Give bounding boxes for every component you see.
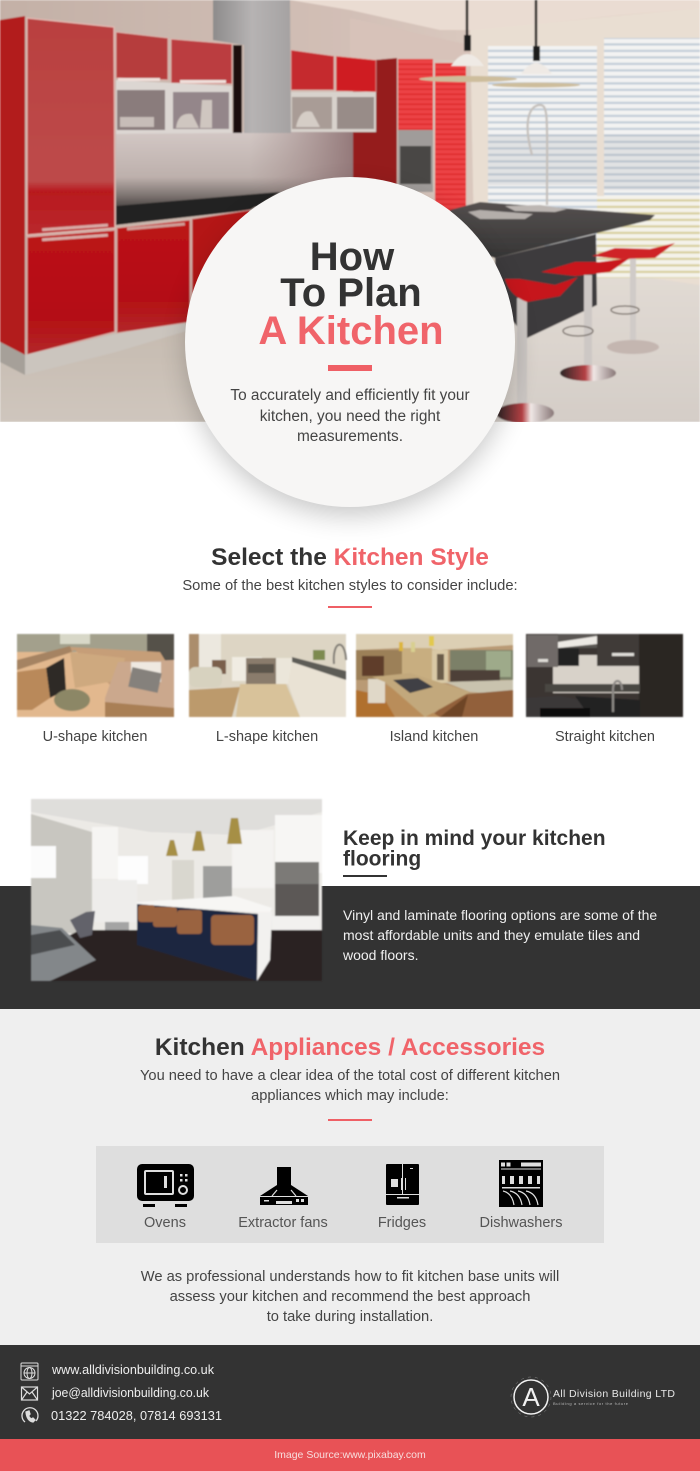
logo: All Division Building: All Division Building LTD xyxy=(553,1388,675,1400)
heading: flooring: Keep in mind your kitchen xyxy=(343,827,606,850)
title xyxy=(258,235,444,353)
style rule xyxy=(328,606,372,608)
closing text: to take during installation. xyxy=(267,1309,433,1325)
label: U-shape kitchen: U-shape kitchen xyxy=(43,729,147,745)
flooring rule xyxy=(343,875,387,877)
email: joe@alldivisionbuilding.co.uk xyxy=(51,1385,209,1400)
closing text: We as professional understands how to fit kitchen base units will xyxy=(141,1269,559,1285)
flooring text: Vinyl and laminate flooring options are some of the xyxy=(343,907,657,923)
title: How xyxy=(310,235,395,279)
photo: L-shape kitchen xyxy=(189,634,346,717)
icon: web xyxy=(21,1363,38,1380)
label: extractor fans: Extractor fans xyxy=(238,1215,328,1231)
logo: All Division Building: Building a service for the future xyxy=(553,1401,629,1406)
hero photo: red kitchen xyxy=(0,0,700,423)
appliances heading: Kitchen Appliances / Accessories xyxy=(155,1034,545,1061)
photo: Island kitchen xyxy=(356,634,513,717)
intro text: measurements. xyxy=(297,428,403,445)
flooring text xyxy=(342,907,657,963)
section heading: kitchen style: Select the Kitchen Style xyxy=(211,544,489,571)
appliances intro: You need to have a clear idea of the total cost of different kitchen xyxy=(140,1068,560,1084)
label: Straight kitchen: Straight kitchen xyxy=(555,729,655,745)
footer contact panel xyxy=(0,1345,700,1439)
icon: mail xyxy=(22,1387,38,1400)
logo: All Division Building xyxy=(511,1377,675,1417)
icon: phone xyxy=(22,1408,38,1422)
island xyxy=(495,234,597,338)
label: fridges: Fridges xyxy=(378,1215,426,1231)
flooring text: wood floors. xyxy=(342,947,418,963)
label: dishwashers: Dishwashers xyxy=(480,1215,562,1231)
white band below hero xyxy=(0,422,700,886)
heading: flooring xyxy=(343,827,606,877)
photo: U-shape kitchen xyxy=(17,634,174,717)
appliances intro xyxy=(140,1068,560,1104)
title: A Kitchen xyxy=(258,309,444,353)
appliances intro: appliances which may include: xyxy=(251,1088,449,1104)
photo: white kitchen with island xyxy=(31,799,322,981)
phone numbers: 01322 784028, 07814 693131 xyxy=(51,1408,222,1423)
icon: oven xyxy=(137,1164,194,1207)
label: L-shape kitchen: L-shape kitchen xyxy=(216,729,318,745)
logo: All Division Building: A xyxy=(522,1382,540,1412)
icon: fridge xyxy=(386,1164,419,1205)
heading: flooring: flooring xyxy=(343,848,421,870)
hero circle panel xyxy=(185,177,515,514)
icon: extractor fan xyxy=(260,1167,308,1205)
pendants xyxy=(466,0,468,40)
intro text xyxy=(230,387,470,445)
icon: dishwasher xyxy=(499,1160,543,1207)
gray panel: appliances xyxy=(0,1009,700,1345)
title: To Plan xyxy=(280,271,422,315)
source bar xyxy=(0,1439,700,1471)
intro text: kitchen, you need the right xyxy=(260,408,441,425)
title rule xyxy=(328,365,372,371)
faucet xyxy=(528,105,547,205)
flooring text: most affordable units and they emulate tiles and xyxy=(343,927,640,943)
label: ovens: Ovens xyxy=(144,1215,186,1231)
circle drop shadow xyxy=(188,190,512,514)
dark band: flooring xyxy=(0,886,700,1009)
closing text xyxy=(141,1269,559,1325)
website: www.alldivisionbuilding.co.uk xyxy=(51,1362,214,1377)
style subtitle: Some of the best kitchen styles to consider include: xyxy=(182,578,518,594)
photo: Straight kitchen xyxy=(526,634,683,717)
circle xyxy=(185,177,515,507)
stools xyxy=(517,298,527,406)
closing text: assess your kitchen and recommend the best approach xyxy=(170,1289,530,1305)
image source text: Image Source:www.pixabay.com xyxy=(274,1449,426,1461)
intro text: To accurately and efficiently fit your xyxy=(230,387,470,404)
left side panel xyxy=(0,16,25,355)
appliance strip xyxy=(96,1146,604,1243)
section heading: kitchen style xyxy=(182,544,518,608)
appliances rule xyxy=(328,1119,372,1121)
label: Island kitchen: Island kitchen xyxy=(390,729,478,745)
